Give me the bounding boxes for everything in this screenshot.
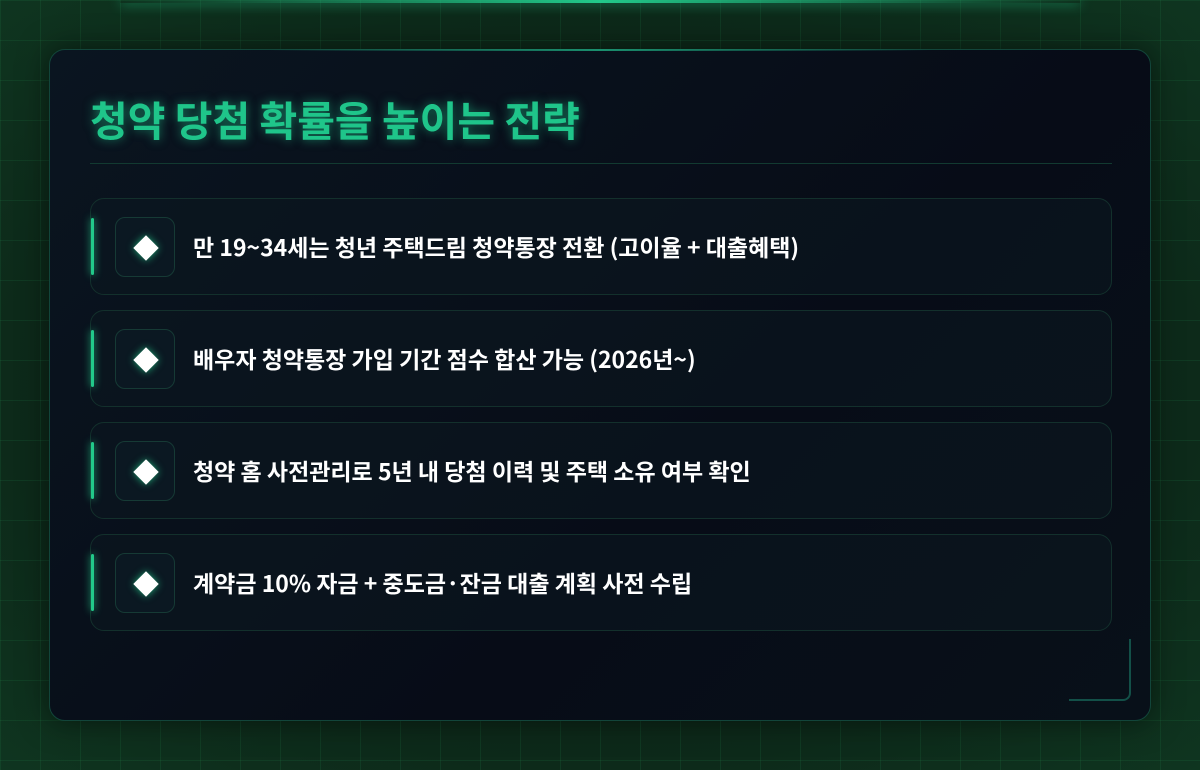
item 2 <box>90 310 1112 407</box>
item 1: 만 19~34세는 청년 주택드림 청약통장 전환 (고이율 + 대출혜택) <box>193 229 799 263</box>
item 3 <box>90 422 1112 519</box>
item 4 <box>90 534 1112 631</box>
item 2: 배우자 청약통장 가입 기간 점수 합산 가능 (2026년~) <box>193 341 696 375</box>
item 4: 계약금 10% 자금 + 중도금·잔금 대출 계획 사전 수립 <box>193 565 692 599</box>
item 1 <box>90 198 1112 295</box>
title: 청약 당첨 확률을 높이는 전략 <box>90 88 580 148</box>
item 3: 청약 홈 사전관리로 5년 내 당첨 이력 및 주택 소유 여부 확인 <box>193 453 751 487</box>
